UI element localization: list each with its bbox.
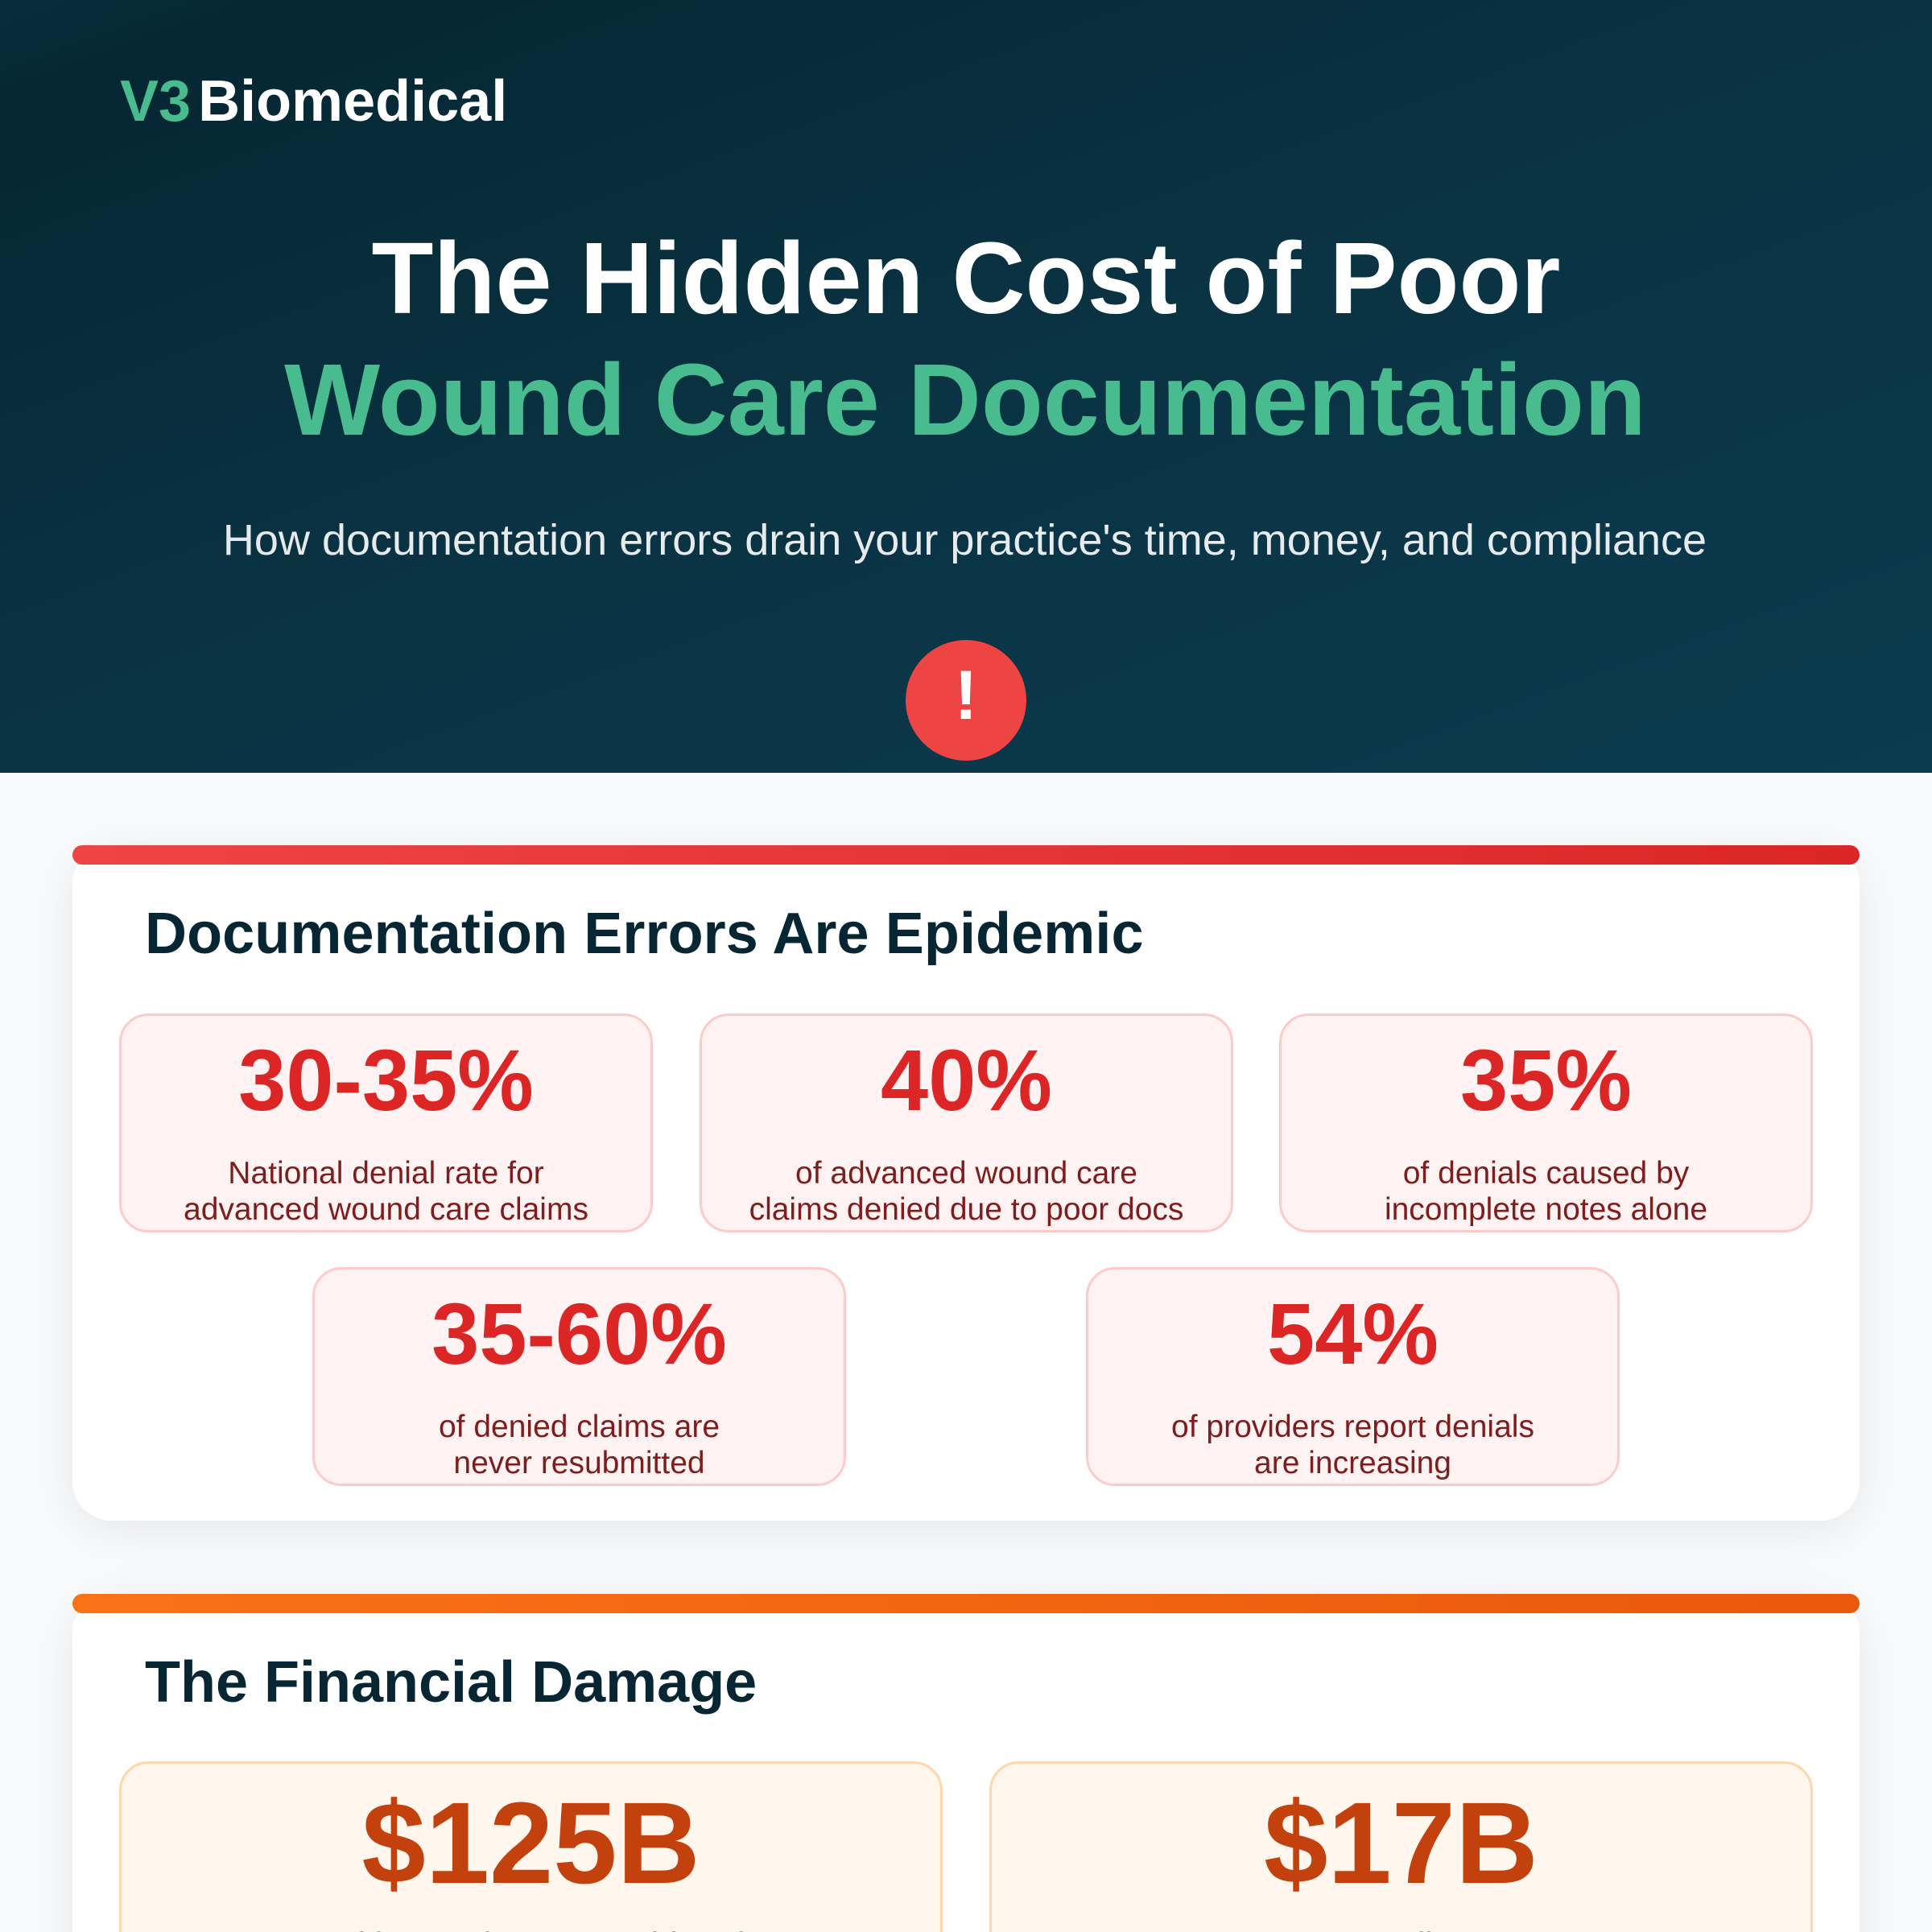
red accent bar (72, 845, 1860, 865)
stat: 30-35% (119, 1013, 653, 1232)
stat label line 1: of denials caused by (1403, 1156, 1689, 1190)
stat label line 1: of providers report denials (1171, 1409, 1534, 1444)
stat: 40% (700, 1013, 1233, 1232)
stat value: 35% (1460, 1031, 1632, 1129)
subtitle: How documentation errors drain your practice's time, money, and compliance (223, 516, 1707, 564)
stat label line 1: National denial rate for (228, 1156, 544, 1190)
stat label line 2: never resubmitted (453, 1446, 705, 1480)
stat: $125B (119, 1761, 943, 1932)
logo: V3 Biomedical: V3Biomedical (120, 69, 507, 134)
icon: alert circle: ! (955, 657, 977, 734)
stat label line 1: of denied claims are (439, 1409, 720, 1444)
icon: alert circle (906, 640, 1026, 761)
title line 1: The Hidden Cost of Poor (372, 221, 1560, 335)
title line 2: Wound Care Documentation (284, 343, 1646, 456)
stat value: $17B (1264, 1778, 1538, 1908)
stat label line 2: incomplete notes alone (1385, 1191, 1707, 1227)
stat: 35-60% (312, 1267, 846, 1486)
stat value: $125B (361, 1778, 700, 1908)
panel: financial damage (72, 1594, 1860, 1932)
stat value: 30-35% (238, 1031, 534, 1129)
orange accent bar (72, 1594, 1860, 1613)
stat value: 54% (1267, 1285, 1439, 1382)
heading: documentation errors: Documentation Errors Are Epidemic (145, 902, 1144, 966)
stat: 54% (1086, 1267, 1620, 1486)
stat: 35% (1279, 1013, 1813, 1232)
stat value: 35-60% (431, 1285, 727, 1382)
stat label line 2: claims denied due to poor docs (749, 1191, 1183, 1227)
stat: $17B (989, 1761, 1813, 1932)
panel: documentation errors (72, 845, 1860, 1521)
stat label line 1: of advanced wound care (795, 1156, 1137, 1190)
header banner (0, 0, 1932, 773)
stat label line 2: are increasing (1254, 1446, 1451, 1480)
stat label line 2: advanced wound care claims (184, 1191, 588, 1227)
heading: financial damage: The Financial Damage (145, 1650, 757, 1715)
stat value: 40% (881, 1031, 1052, 1129)
